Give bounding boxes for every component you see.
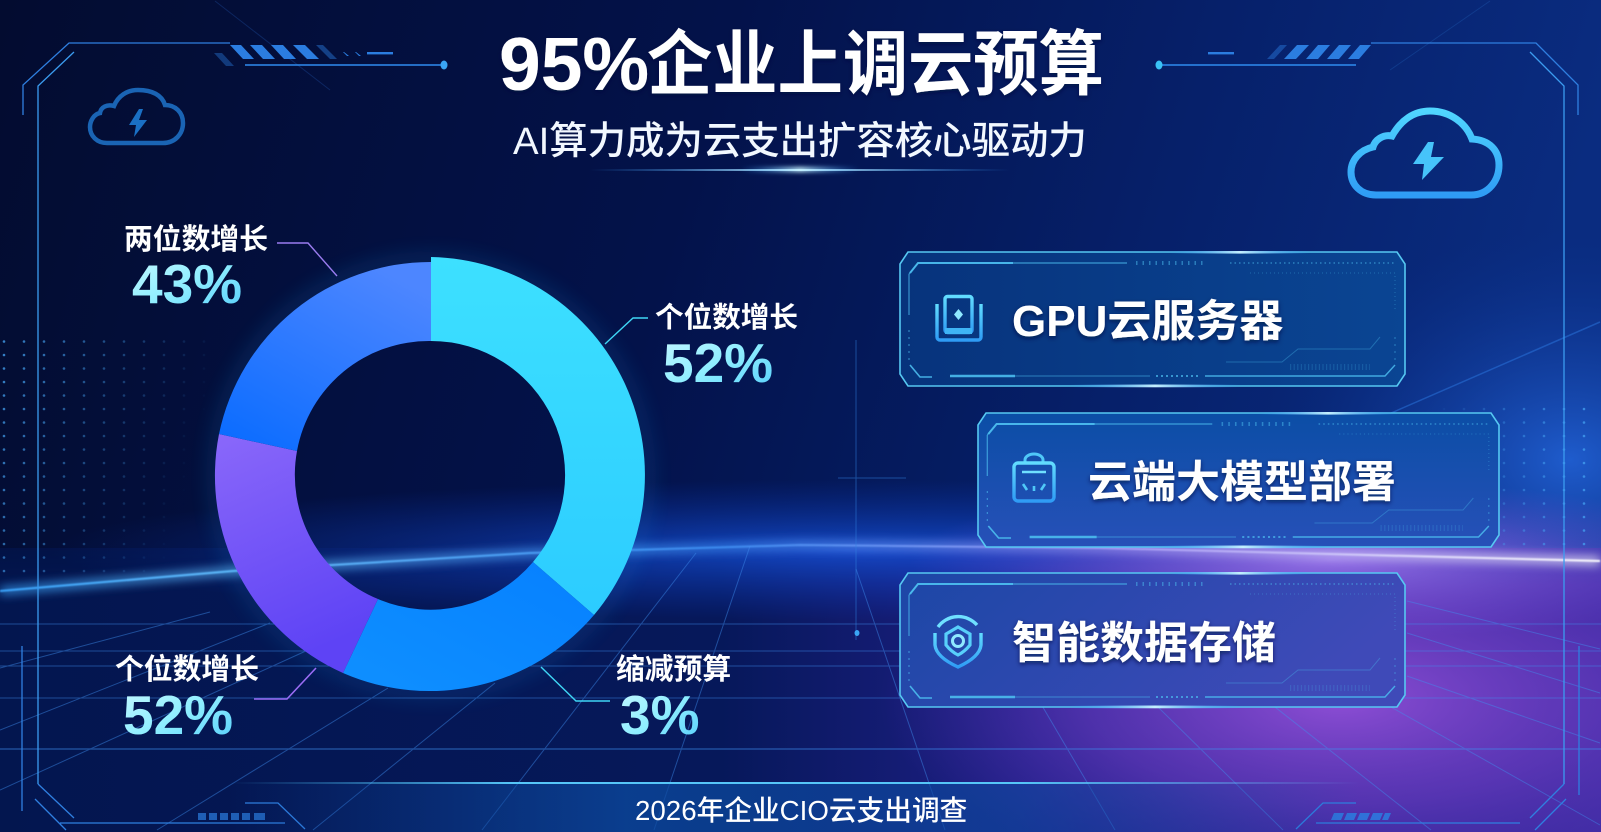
text: 智能数据存储 bbox=[1012, 619, 1276, 668]
icon: GPU card bbox=[937, 296, 981, 340]
label: 个位数增长 52% left: 个位数增长 bbox=[115, 653, 259, 686]
label: 两位数增长 43%: 两位数增长 bbox=[124, 223, 268, 256]
title: 企业上调云预算 bbox=[647, 26, 1104, 105]
donut chart bbox=[215, 257, 647, 692]
segment: top-right cyan bbox=[431, 257, 645, 615]
title bbox=[499, 22, 1104, 106]
label: 个位数增长 52% left bbox=[115, 653, 316, 746]
panel: 智能数据存储 bbox=[900, 572, 1405, 708]
label: 缩减预算 3%: 缩减预算 bbox=[616, 654, 731, 686]
panel: 云端大模型部署 bbox=[978, 412, 1499, 548]
footer bar bbox=[230, 782, 1360, 832]
icon: large cloud with lightning bbox=[1351, 111, 1499, 195]
panel: GPU云服务器 bbox=[900, 251, 1405, 387]
segment: top-left blue bbox=[219, 262, 431, 451]
segment: bottom blue bbox=[343, 562, 594, 691]
icon: server bag bbox=[1014, 454, 1054, 501]
segment: lower-left purple bbox=[215, 434, 378, 673]
title: 95% bbox=[499, 22, 649, 106]
text: 云端大模型部署 bbox=[1088, 458, 1396, 507]
label: 个位数增长 52% right: 个位数增长 bbox=[655, 301, 798, 334]
icon: shield storage bbox=[935, 617, 981, 667]
label: 个位数增长 52% left: 52% bbox=[123, 684, 233, 746]
horizon light bbox=[0, 545, 1600, 591]
footer text: 2026年企业CIO云支出调查 bbox=[635, 795, 967, 826]
label: 个位数增长 52% right: 52% bbox=[663, 332, 773, 394]
label: 两位数增长 43% bbox=[124, 223, 337, 315]
label: 两位数增长 43%: 43% bbox=[132, 253, 242, 315]
icon: small cloud with lightning bbox=[90, 90, 183, 143]
label: 个位数增长 52% right bbox=[605, 301, 798, 394]
text: GPU云服务器 bbox=[1012, 297, 1283, 346]
label: 缩减预算 3%: 3% bbox=[620, 684, 700, 746]
label: 缩减预算 3% bbox=[541, 654, 731, 746]
subtitle: AI算力成为云支出扩容核心驱动力 bbox=[513, 120, 1087, 163]
